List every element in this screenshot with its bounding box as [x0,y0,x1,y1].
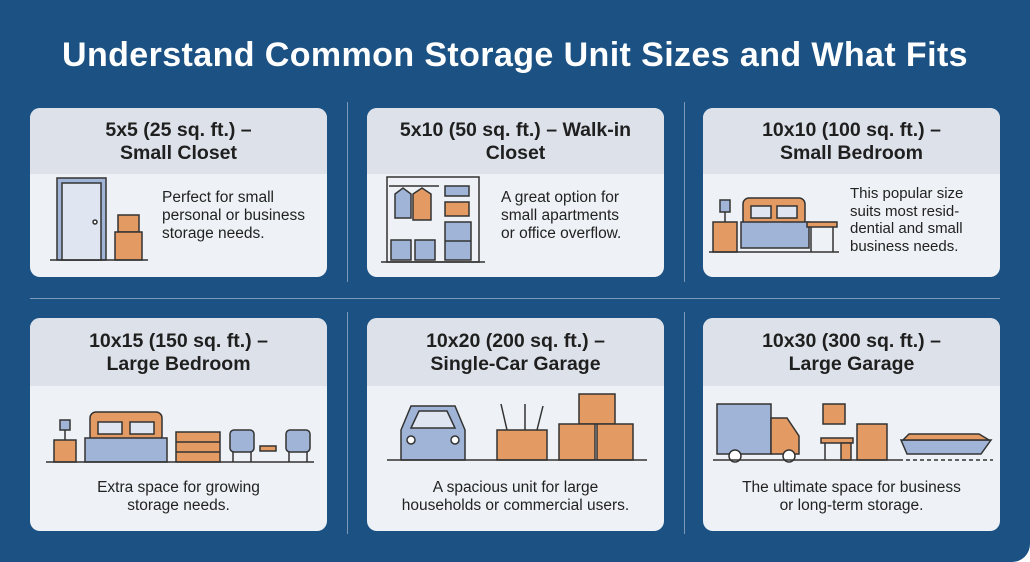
text: 10x10 description: This popular size [850,185,963,202]
text: 10x30 description: The ultimate space for business [742,479,961,496]
heading: 10x15 [30,318,327,386]
text: 5x10 description: A great option for [501,189,619,206]
text: 10x15 description: Extra space for growing [97,479,260,496]
text: 5x10 description: small apartments [501,207,619,224]
heading: 5x10: 5x10 (50 sq. ft.) – Walk-in [400,119,631,141]
heading: 5x10 [367,108,664,174]
heading: 10x10 [703,108,1000,174]
text: 5x5 description: personal or business [162,207,305,224]
heading: 10x20: 10x20 (200 sq. ft.) – [426,330,605,352]
heading: 10x10: 10x10 (100 sq. ft.) – [762,119,941,141]
text: 10x10 description [850,185,963,254]
text: 10x20 description: A spacious unit for large [433,479,598,496]
text: 10x15 description [97,479,260,514]
text: 10x10 description: dential and small [850,220,963,237]
icon: truck, furniture, boat [713,403,993,463]
heading: 10x20: Single-Car Garage [430,353,601,375]
icon: closet [381,176,485,263]
text: 10x20 description: households or commercial users. [402,497,629,514]
text: 5x10 description: or office overflow. [501,225,621,242]
heading: 10x30: 10x30 (300 sq. ft.) – [762,330,941,352]
icon: door and boxes [50,177,148,261]
text: 10x10 description: suits most resid- [850,202,959,220]
panel: 10x30 [703,318,1000,531]
panel: 5x5 [30,108,327,277]
panel: 10x10 [703,108,1000,277]
text: 5x5 description: storage needs. [162,225,265,242]
text: 10x10 description: business needs. [850,238,958,254]
text: 5x5 description [162,189,305,242]
text: 5x10 description [501,189,621,242]
text: 10x30 description: or long-term storage. [780,497,923,514]
heading: 10x10: Small Bedroom [780,142,923,164]
text: 10x30 description [742,479,961,514]
heading: 5x10: Closet [486,142,545,164]
icon: car, tools, boxes [387,393,647,461]
panel: 10x20 [367,318,664,531]
heading: 5x5: Small Closet [120,142,237,164]
panel: 10x15 [30,318,327,531]
heading: 10x30: Large Garage [789,353,914,375]
icon: bed [709,197,839,253]
heading: 5x5 [30,108,327,174]
text: 10x15 description: storage needs. [127,497,230,514]
heading: 10x15: Large Bedroom [106,353,251,375]
panel: 5x10 [367,108,664,277]
heading: 10x15: 10x15 (150 sq. ft.) – [89,330,268,352]
heading: 10x20 [367,318,664,386]
icon: bedroom furniture [46,411,314,463]
heading: 10x30 [703,318,1000,386]
title: Understand Common Storage Unit Sizes and What Fits [62,36,968,74]
text: 10x20 description [402,479,629,514]
text: 5x5 description: Perfect for small [162,189,274,206]
heading: 5x5: 5x5 (25 sq. ft.) – [105,119,252,141]
